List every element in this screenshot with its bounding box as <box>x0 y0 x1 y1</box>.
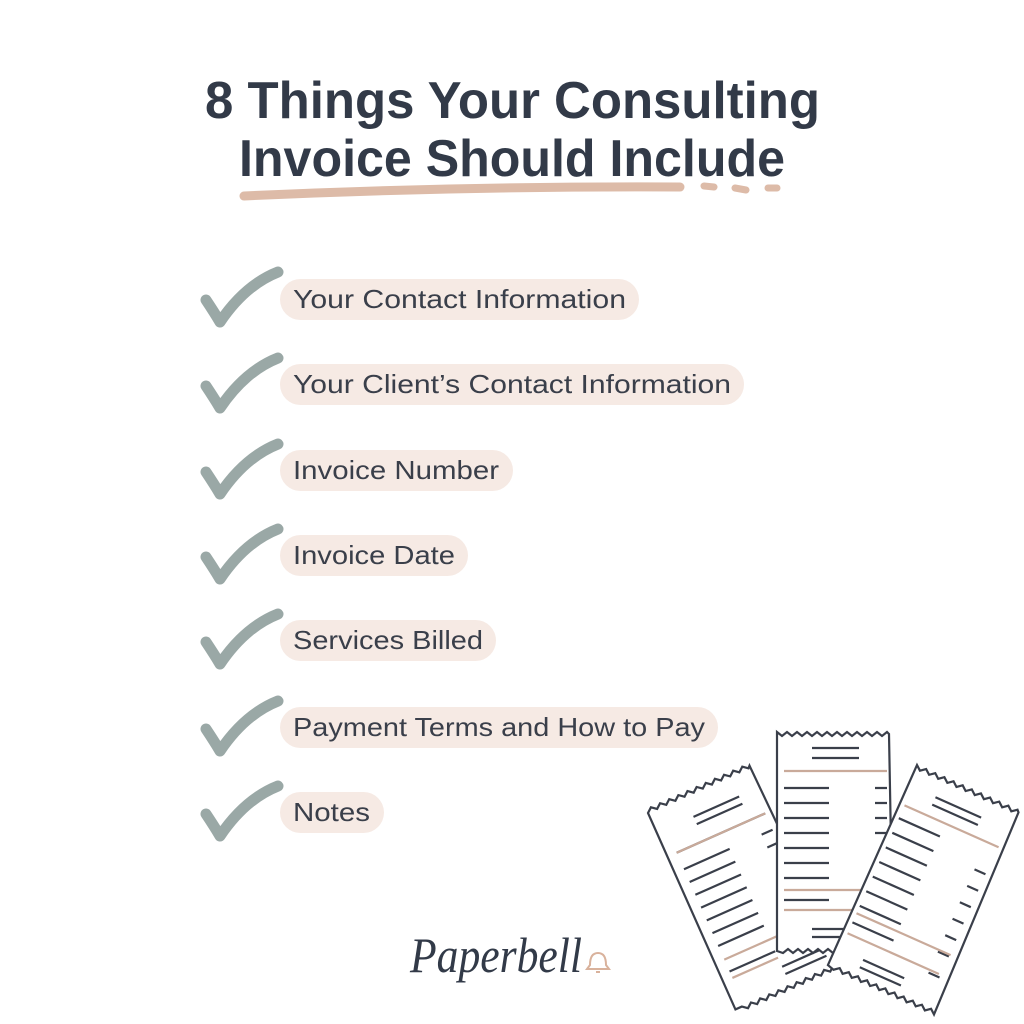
illustration: receipts <box>646 732 1024 1014</box>
item 2: Your Client’s Contact Information <box>293 369 731 399</box>
checklist <box>206 272 744 836</box>
item 3: Invoice Number <box>293 455 499 485</box>
item 7: Notes <box>293 797 370 827</box>
item 1 <box>206 272 639 322</box>
middle receipt <box>777 732 893 953</box>
title underline <box>244 186 777 196</box>
item 3 <box>206 444 513 494</box>
title <box>205 72 820 188</box>
title: 8 Things Your Consulting <box>205 72 820 130</box>
item 5 <box>206 614 496 664</box>
right receipt <box>827 765 1024 1014</box>
item 6 <box>206 701 718 751</box>
item 4: Invoice Date <box>293 540 455 570</box>
item 5: Services Billed <box>293 625 483 655</box>
item 4 <box>206 529 468 579</box>
logo: Paperbell: Paperbell <box>409 927 582 983</box>
item 2 <box>206 358 744 408</box>
item 7 <box>206 786 384 836</box>
left receipt <box>646 762 844 1013</box>
item 6: Payment Terms and How to Pay <box>293 712 705 742</box>
title: Invoice Should Include <box>239 130 785 188</box>
item 1: Your Contact Information <box>293 284 626 314</box>
